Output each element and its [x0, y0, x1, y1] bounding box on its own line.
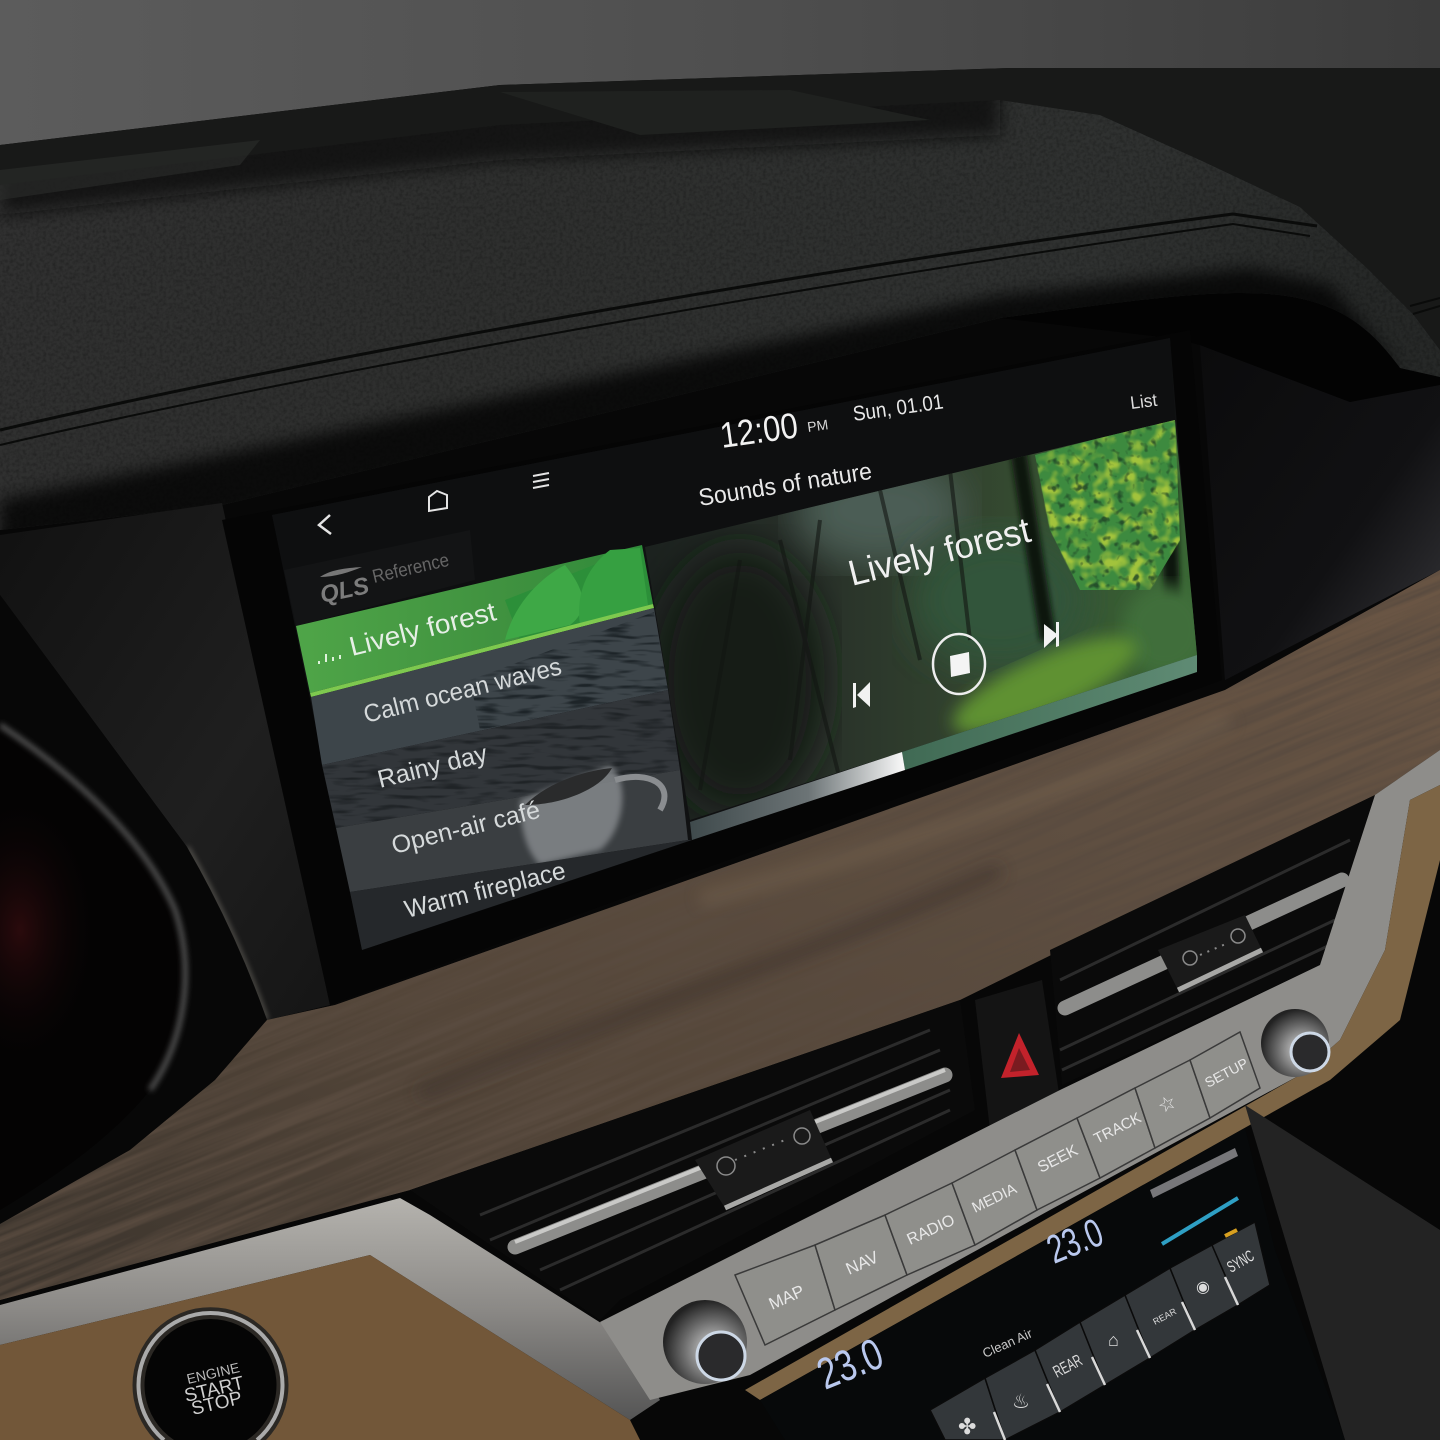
audio shortcut buttons: SETUP — [1202, 1055, 1251, 1091]
dashboard top flat plane — [0, 68, 1440, 350]
audio shortcut buttons: SEEK — [1035, 1142, 1081, 1177]
climate control panel: 23.0 — [810, 1329, 890, 1399]
audio shortcut buttons: MAP — [766, 1281, 807, 1314]
lower console carpet — [1245, 1105, 1440, 1440]
list row: calm ocean waves — [311, 608, 668, 765]
silver trim — [0, 750, 1440, 1420]
infotainment screen — [272, 338, 1210, 950]
previous icon — [853, 682, 870, 708]
audio shortcut buttons: TRACK — [1091, 1109, 1144, 1148]
forest image — [640, 410, 1210, 830]
left air vent — [410, 1000, 975, 1320]
climate control panel: ◉ — [1196, 1279, 1210, 1296]
engine start button: ENGINE — [185, 1359, 241, 1387]
list row: warm fireplace — [350, 840, 692, 950]
progress bar — [690, 752, 905, 840]
audio shortcut buttons: MEDIA — [969, 1180, 1019, 1217]
climate control panel: ⌂ — [1108, 1330, 1119, 1350]
clock: 12:00 — [717, 404, 800, 456]
audio shortcut buttons — [735, 1032, 1260, 1345]
climate control panel: SYNC — [1224, 1248, 1257, 1276]
engine start button: START — [182, 1373, 246, 1407]
screen base — [272, 338, 1197, 950]
climate control panel: REAR — [1050, 1351, 1085, 1382]
wood trim — [0, 570, 1440, 1300]
audio shortcut buttons: RADIO — [905, 1212, 958, 1249]
climate control panel: Clean Air — [980, 1325, 1035, 1361]
list labels: Lively forest — [346, 596, 499, 662]
list labels: Open-air café — [389, 796, 543, 860]
climate control panel: ♨ — [1012, 1391, 1030, 1413]
brown leather right — [745, 785, 1440, 1400]
QLS logo: QLS — [318, 572, 372, 609]
header: menu icon — [533, 473, 549, 488]
list row: rainy day — [322, 690, 680, 828]
right air vent — [1050, 795, 1375, 1085]
clock period: PM — [806, 416, 829, 435]
track title: Lively forest — [844, 509, 1034, 594]
climate control panel: 23.0 — [1041, 1211, 1109, 1272]
equalizer icon — [319, 654, 340, 664]
display bezel — [222, 330, 1222, 1005]
brown leather left — [0, 1255, 640, 1440]
climate control panel: ✤ — [958, 1414, 976, 1439]
list row: open-air cafe — [336, 765, 688, 892]
left volume knob — [663, 1300, 747, 1384]
engine start button: STOP — [189, 1388, 244, 1420]
instrument cluster — [0, 595, 267, 1224]
climate control panel: REAR — [1151, 1306, 1178, 1327]
date: Sun, 01.01 — [851, 391, 945, 426]
list labels: Calm ocean waves — [361, 653, 564, 729]
engine start button — [133, 1307, 288, 1440]
list labels — [346, 596, 569, 924]
dashboard leather hood — [0, 100, 1440, 530]
audio shortcut buttons: NAV — [843, 1247, 882, 1279]
stop button — [933, 634, 985, 694]
list labels: Rainy day — [375, 739, 491, 794]
header: home icon — [429, 491, 447, 511]
list button: List — [1129, 390, 1158, 413]
list labels: Warm fireplace — [402, 857, 569, 924]
left side panel — [0, 503, 330, 1020]
reference label: Reference — [370, 550, 451, 588]
right side panel under hood — [1000, 293, 1440, 680]
windshield — [0, 0, 1440, 145]
right tuning knob — [1261, 1009, 1329, 1077]
header: back arrow — [319, 515, 331, 534]
screen title: Sounds of nature — [697, 458, 874, 512]
hazard button — [975, 980, 1060, 1130]
climate control panel — [760, 1128, 1345, 1440]
audio shortcut buttons: ☆ — [1154, 1091, 1180, 1118]
next icon — [1044, 622, 1059, 648]
list row: lively forest — [296, 545, 654, 697]
